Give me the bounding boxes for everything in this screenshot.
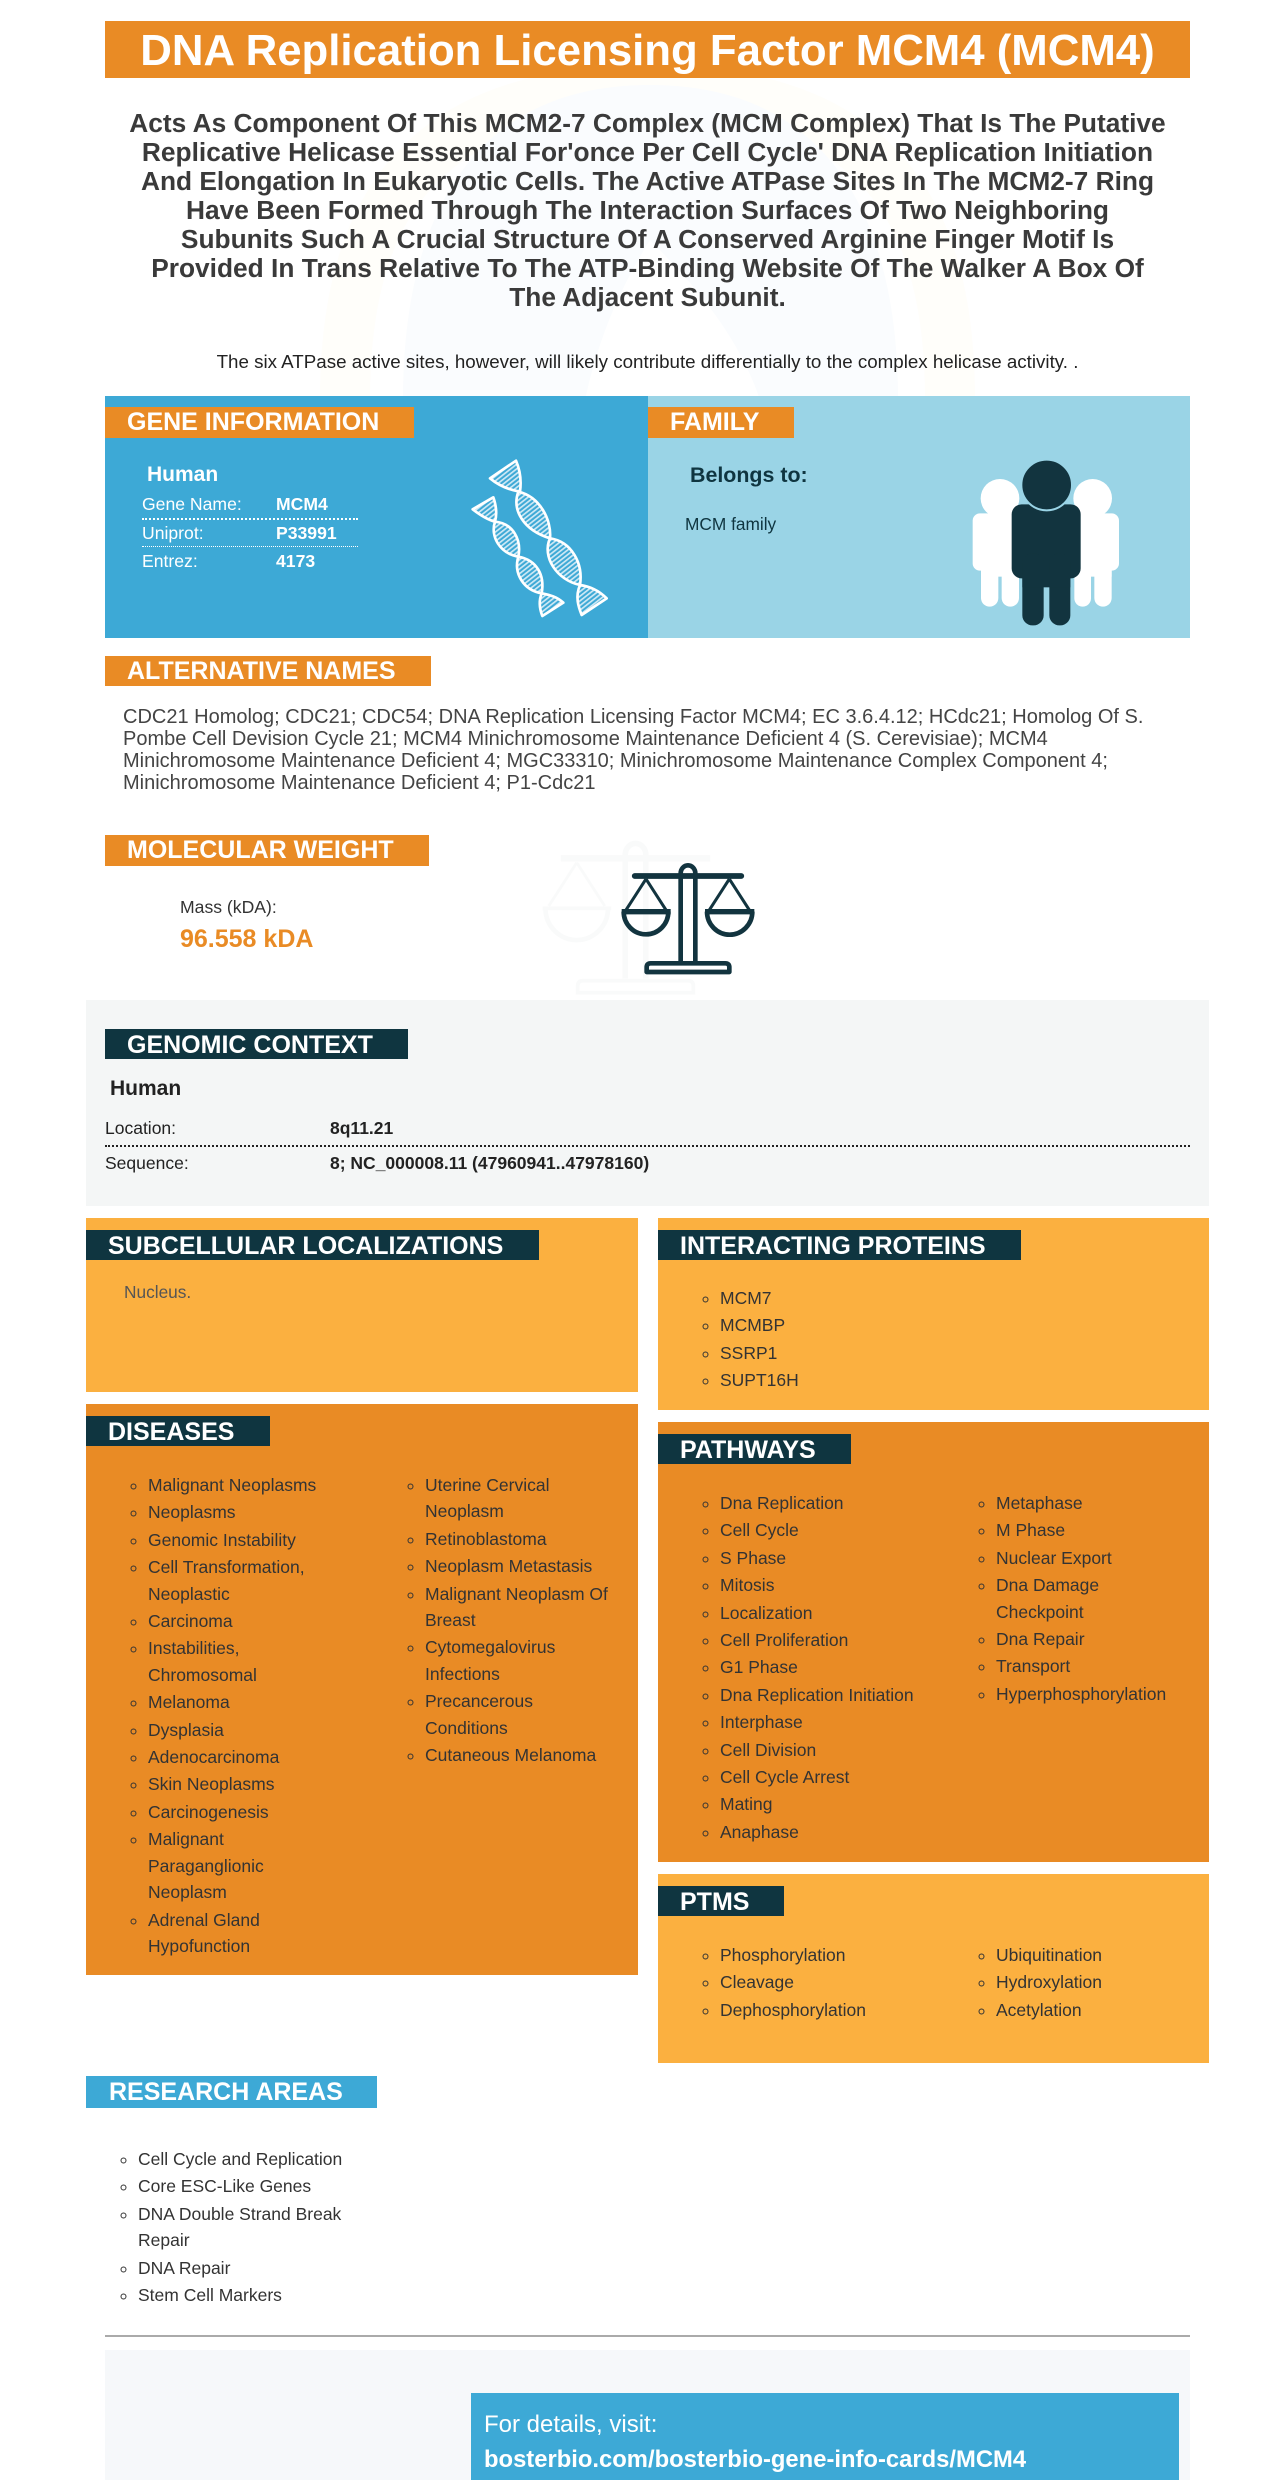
- disease list column 2: Infections: [425, 1664, 500, 1684]
- pathway list column 1: Localization: [720, 1603, 812, 1623]
- pathway list column 2: Transport: [996, 1656, 1070, 1676]
- summary paragraph: Replicative Helicase Essential For'once Per Cell Cycle' DNA Replication Initiation: [142, 137, 1153, 167]
- disease list column 1: Skin Neoplasms: [148, 1774, 274, 1794]
- alternative names text: [123, 706, 1143, 794]
- disease list column 1: Adenocarcinoma: [148, 1747, 279, 1767]
- panel: footer: [105, 2350, 1190, 2480]
- disease list column 1: Neoplasms: [148, 1502, 236, 1522]
- disease list column 2: Malignant Neoplasm Of: [425, 1584, 608, 1604]
- panel: genomic context: [86, 1000, 1209, 1206]
- disease list column 2: Precancerous: [425, 1691, 533, 1711]
- sequence row: Sequence:: [105, 1153, 189, 1173]
- pathway list column 2: Hyperphosphorylation: [996, 1684, 1166, 1704]
- localization text: Nucleus.: [124, 1282, 191, 1302]
- disease list column 1: Genomic Instability: [148, 1530, 296, 1550]
- heading: family: [648, 407, 794, 438]
- gene fields: Gene Name:: [142, 494, 242, 514]
- heading: subcellular localizations: SUBCELLULAR LOCALIZATIONS: [108, 1232, 503, 1260]
- pathway list column 2: Nuclear Export: [996, 1548, 1112, 1568]
- heading: PTMs: [658, 1886, 784, 1916]
- PTM list column 1: Cleavage: [720, 1972, 794, 1992]
- disease list column 2: Neoplasm Metastasis: [425, 1556, 592, 1576]
- alternative names text: Minichromosome Maintenance Deficient 4; P1-Cdc21: [123, 772, 595, 794]
- disease list column 2: Uterine Cervical: [425, 1475, 549, 1495]
- panel: subcellular localizations: [86, 1218, 638, 1392]
- PTM list column 1: Phosphorylation: [720, 1945, 846, 1965]
- heading: PTMs: PTMS: [680, 1888, 749, 1916]
- PTM list column 2: [978, 1945, 1102, 2020]
- protein list: SUPT16H: [720, 1370, 799, 1390]
- pathway list column 1: Dna Replication Initiation: [720, 1685, 914, 1705]
- pathway list column 2: Dna Repair: [996, 1629, 1085, 1649]
- callout: details link: bosterbio.com/bosterbio-gene-info-cards/MCM4: [484, 2446, 1026, 2473]
- disease list column 2: Retinoblastoma: [425, 1529, 547, 1549]
- alternative names text: Minichromosome Maintenance Deficient 4; MGC33310; Minichromosome Maintenance Complex Component 4;: [123, 750, 1108, 772]
- protein list: MCMBP: [720, 1315, 785, 1335]
- disease list column 2: Breast: [425, 1610, 476, 1630]
- disease list column 2: Cutaneous Melanoma: [425, 1745, 596, 1765]
- pathway list column 1: Anaphase: [720, 1822, 799, 1842]
- panel: PTMs: [658, 1874, 1209, 2063]
- pathway list column 1: Cell Proliferation: [720, 1630, 848, 1650]
- heading: interacting proteins: INTERACTING PROTEINS: [680, 1232, 986, 1260]
- summary paragraph: And Elongation In Eukaryotic Cells. The Active ATPase Sites In The MCM2-7 Ring: [141, 166, 1154, 196]
- alternative names text: CDC21 Homolog; CDC21; CDC54; DNA Replication Licensing Factor MCM4; EC 3.6.4.12; HCdc21; Homolog Of S.: [123, 706, 1143, 728]
- pathway list column 1: G1 Phase: [720, 1657, 798, 1677]
- summary paragraph: [129, 108, 1166, 312]
- species label: Human: [110, 1077, 181, 1100]
- PTM list column 2: Acetylation: [996, 2000, 1082, 2020]
- heading: diseases: [86, 1416, 270, 1446]
- pathway list column 1: [702, 1493, 914, 1842]
- disease list column 1: Dysplasia: [148, 1720, 224, 1740]
- disease list column 1: Carcinogenesis: [148, 1802, 269, 1822]
- disease list column 1: Malignant: [148, 1829, 224, 1849]
- protein list: [702, 1288, 799, 1390]
- gene fields: [142, 494, 358, 571]
- heading: pathways: [658, 1434, 851, 1464]
- disease list column 1: Paraganglionic: [148, 1856, 264, 1876]
- pathway list column 1: Mating: [720, 1794, 773, 1814]
- pathway list column 1: Cell Cycle: [720, 1520, 799, 1540]
- alternative names text: Pombe Cell Devision Cycle 21; MCM4 Minichromosome Maintenance Deficient 4 (S. Cerevisiae); MCM4: [123, 728, 1048, 750]
- research areas list: Cell Cycle and Replication: [138, 2149, 342, 2169]
- disease list column 2: Neoplasm: [425, 1501, 504, 1521]
- callout: details link: [471, 2393, 1179, 2480]
- research areas list: [120, 2149, 342, 2305]
- gene fields: 4173: [276, 551, 315, 571]
- disease list column 2: [408, 1475, 608, 1765]
- disease list column 2: Cytomegalovirus: [425, 1637, 555, 1657]
- research areas list: DNA Double Strand Break: [138, 2204, 341, 2224]
- panel: pathways: [658, 1422, 1209, 1862]
- panel: interacting proteins: [658, 1218, 1209, 1410]
- pathway list column 1: Dna Replication: [720, 1493, 844, 1513]
- mass label: Mass (kDA):: [180, 897, 277, 917]
- title banner: DNA Replication Licensing Factor MCM4 (MCM4): [140, 26, 1155, 75]
- disease list column 1: Carcinoma: [148, 1611, 233, 1631]
- protein list: MCM7: [720, 1288, 772, 1308]
- disease list column 1: Melanoma: [148, 1692, 230, 1712]
- pathway list column 2: [978, 1493, 1166, 1704]
- panel: family: [648, 396, 1190, 638]
- icon: people group: [972, 460, 1119, 626]
- belongs to label: Belongs to:: [690, 463, 808, 487]
- research areas list: Stem Cell Markers: [138, 2285, 282, 2305]
- heading: alternative names: ALTERNATIVE NAMES: [127, 657, 396, 685]
- sequence row: [105, 1153, 649, 1173]
- panel: gene information: [105, 396, 648, 638]
- secondary sentence: The six ATPase active sites, however, will likely contribute differentially to the complex helicase activity. .: [217, 351, 1078, 372]
- summary paragraph: Provided In Trans Relative To The ATP-Binding Website Of The Walker A Box Of: [151, 253, 1144, 283]
- disease list column 1: Neoplastic: [148, 1584, 230, 1604]
- sequence row: 8; NC_000008.11 (47960941..47978160): [330, 1153, 649, 1173]
- family value: MCM family: [685, 514, 776, 534]
- pathway list column 2: M Phase: [996, 1520, 1065, 1540]
- pathway list column 1: Cell Division: [720, 1740, 816, 1760]
- heading: gene information: GENE INFORMATION: [127, 408, 379, 436]
- gene fields: Uniprot:: [142, 523, 204, 543]
- protein list: SSRP1: [720, 1343, 777, 1363]
- icon: DNA helices: [471, 459, 608, 618]
- gene fields: P33991: [276, 523, 337, 543]
- PTM list column 2: Hydroxylation: [996, 1972, 1102, 1992]
- disease list column 1: Adrenal Gland: [148, 1910, 260, 1930]
- heading: pathways: PATHWAYS: [680, 1436, 816, 1464]
- PTM list column 1: [702, 1945, 866, 2020]
- research areas list: DNA Repair: [138, 2258, 230, 2278]
- disease list column 1: Neoplasm: [148, 1882, 227, 1902]
- pathway list column 1: S Phase: [720, 1548, 786, 1568]
- summary paragraph: The Adjacent Subunit.: [509, 282, 786, 312]
- disease list column 1: Chromosomal: [148, 1665, 257, 1685]
- pathway list column 2: Dna Damage: [996, 1575, 1099, 1595]
- gene fields: Entrez:: [142, 551, 198, 571]
- location row: 8q11.21: [330, 1118, 393, 1138]
- disease list column 1: Cell Transformation,: [148, 1557, 305, 1577]
- disease list column 1: Malignant Neoplasms: [148, 1475, 316, 1495]
- PTM list column 1: Dephosphorylation: [720, 2000, 866, 2020]
- icon: balance scale: [621, 863, 755, 974]
- pathway list column 2: Checkpoint: [996, 1602, 1084, 1622]
- summary paragraph: Subunits Such A Crucial Structure Of A Conserved Arginine Finger Motif Is: [181, 224, 1114, 254]
- watermark logo: [0, 0, 1288, 400]
- heading: diseases: DISEASES: [108, 1418, 234, 1446]
- research areas list: Repair: [138, 2230, 190, 2250]
- pathway list column 1: Cell Cycle Arrest: [720, 1767, 849, 1787]
- panel: diseases: [86, 1404, 638, 1975]
- summary paragraph: Have Been Formed Through The Interaction Surfaces Of Two Neighboring: [186, 195, 1109, 225]
- pathway list column 1: Mitosis: [720, 1575, 774, 1595]
- summary paragraph: Acts As Component Of This MCM2-7 Complex (MCM Complex) That Is The Putative: [129, 108, 1166, 138]
- PTM list column 2: Ubiquitination: [996, 1945, 1102, 1965]
- heading: family: FAMILY: [670, 408, 759, 436]
- disease list column 1: Instabilities,: [148, 1638, 239, 1658]
- mass value: 96.558 kDA: [180, 925, 313, 953]
- location row: Location:: [105, 1118, 176, 1138]
- heading: genomic context: GENOMIC CONTEXT: [127, 1031, 373, 1059]
- disease list column 2: Conditions: [425, 1718, 508, 1738]
- heading: molecular weight: MOLECULAR WEIGHT: [127, 836, 394, 864]
- gene fields: MCM4: [276, 494, 328, 514]
- heading: research areas: RESEARCH AREAS: [109, 2078, 343, 2106]
- research areas list: Core ESC-Like Genes: [138, 2176, 311, 2196]
- species label: Human: [147, 463, 218, 486]
- pathway list column 1: Interphase: [720, 1712, 803, 1732]
- disease list column 1: Hypofunction: [148, 1936, 250, 1956]
- divider rule: [105, 2335, 1190, 2337]
- callout: details link: For details, visit:: [484, 2411, 657, 2438]
- location row: [105, 1118, 393, 1138]
- pathway list column 2: Metaphase: [996, 1493, 1083, 1513]
- faint scale watermark: [520, 830, 780, 1010]
- disease list column 1: [130, 1475, 316, 1956]
